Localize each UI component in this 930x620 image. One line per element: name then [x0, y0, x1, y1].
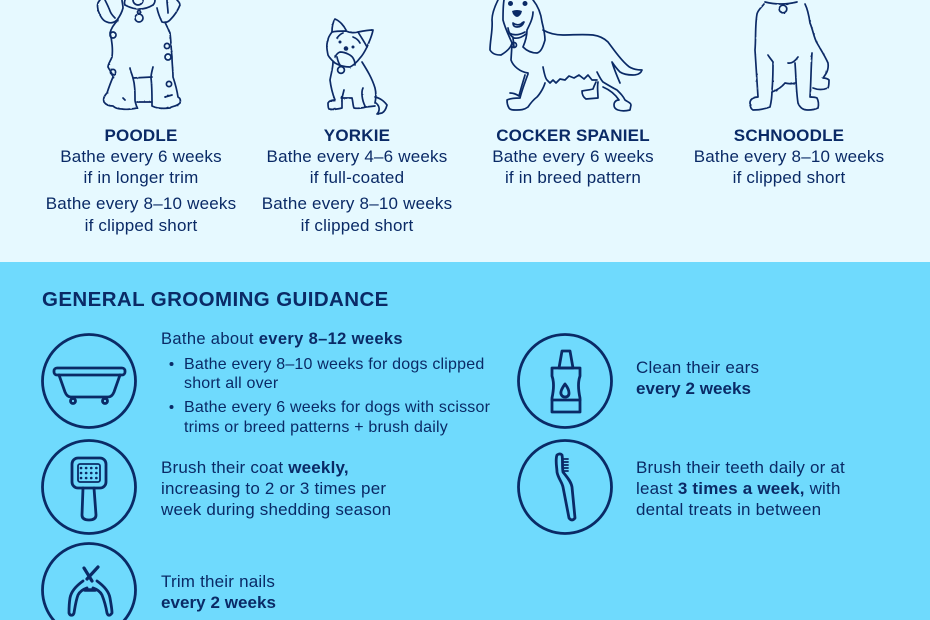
- text: cocker spaniel: if in breed pattern: [505, 168, 641, 187]
- icon: nail clippers: [42, 544, 136, 620]
- text: brushing coat: Brush their coat weekly,: [161, 458, 349, 477]
- text: nail trimming: [161, 572, 276, 612]
- text: yorkie: if clipped short: [301, 216, 413, 235]
- text: cocker spaniel: Bathe every 6 weeks: [492, 147, 654, 166]
- text: poodle: if clipped short: [85, 216, 197, 235]
- text: ear cleaning: Clean their ears: [636, 358, 759, 377]
- text: schnoodle: if clipped short: [733, 168, 845, 187]
- icon: bathtub: [42, 334, 136, 428]
- icon: brush: [42, 440, 136, 534]
- heading: GENERAL GROOMING GUIDANCE: [42, 288, 389, 311]
- icon: toothbrush: [518, 440, 612, 534]
- text: cocker spaniel: COCKER SPANIEL: [496, 126, 650, 145]
- illustration: poodle: [98, 0, 180, 109]
- text: yorkie: [262, 126, 452, 235]
- text: bathing guidance: Bathe about every 8–12 weeks: [161, 330, 403, 348]
- text: bathing guidance: [161, 330, 491, 436]
- text: poodle: Bathe every 6 weeks: [60, 147, 222, 166]
- text: yorkie: Bathe every 8–10 weeks: [262, 194, 452, 213]
- text: bathing guidance: trims or breed patterns + brush daily: [184, 419, 448, 436]
- text: brushing coat: increasing to 2 or 3 times per: [161, 479, 386, 498]
- text: yorkie: if full-coated: [310, 168, 404, 187]
- icon: ear cleaner bottle: [518, 334, 612, 428]
- text: schnoodle: [694, 126, 884, 187]
- panel: general grooming guidance: [0, 262, 930, 620]
- text: brushing coat: week during shedding season: [160, 500, 391, 519]
- text: nail trimming: Trim their nails: [161, 572, 275, 591]
- text: schnoodle: SCHNOODLE: [734, 126, 844, 145]
- text: poodle: if in longer trim: [84, 168, 198, 187]
- text: schnoodle: Bathe every 8–10 weeks: [694, 147, 884, 166]
- text: brushing teeth: Brush their teeth daily or at: [636, 458, 845, 477]
- text: ear cleaning: [636, 358, 759, 398]
- text: brushing teeth: [636, 458, 845, 519]
- illustration: yorkie: [327, 19, 387, 114]
- text: bathing guidance: Bathe every 8–10 weeks for dogs clipped: [184, 356, 484, 373]
- text: brushing coat: [160, 458, 391, 519]
- text: poodle: [46, 126, 236, 235]
- text: ear cleaning: every 2 weeks: [636, 379, 751, 398]
- text: poodle: POODLE: [104, 126, 178, 145]
- text: nail trimming: every 2 weeks: [161, 593, 276, 612]
- text: yorkie: YORKIE: [324, 126, 390, 145]
- text: yorkie: Bathe every 4–6 weeks: [267, 147, 447, 166]
- illustration: cocker spaniel: [490, 0, 642, 111]
- text: bathing guidance: short all over: [184, 375, 279, 392]
- text: bathing guidance: Bathe every 6 weeks for dogs with scissor: [184, 399, 491, 416]
- text: brushing teeth: dental treats in between: [636, 500, 821, 519]
- text: brushing teeth: least 3 times a week, with: [636, 479, 841, 498]
- illustration: schnoodle: [750, 2, 829, 110]
- text: poodle: Bathe every 8–10 weeks: [46, 194, 236, 213]
- text: cocker spaniel: [492, 126, 654, 187]
